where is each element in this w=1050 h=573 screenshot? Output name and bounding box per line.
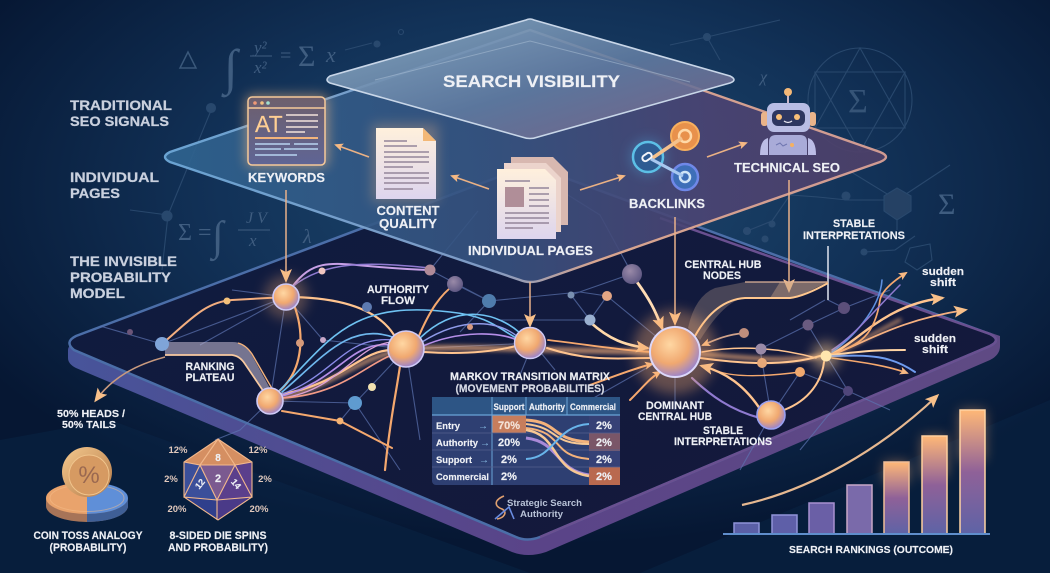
matrix text: 2% xyxy=(501,471,517,483)
matrix flows xyxy=(526,420,589,476)
side labels: TRADITIONAL xyxy=(70,97,172,113)
icon: eight sided die: 20% xyxy=(167,504,187,515)
matrix text: Authority xyxy=(529,402,566,412)
network labels: INTERPRETATIONS xyxy=(803,230,905,242)
network labels: CENTRAL HUB xyxy=(684,259,762,271)
panel: traditional seo signals plane xyxy=(165,30,886,282)
matrix text: Entry xyxy=(436,421,461,432)
logo: strategic search authority: Authority xyxy=(520,509,563,519)
icon: keywords window xyxy=(246,95,328,167)
network labels: DOMINANT xyxy=(646,400,704,412)
matrix text: → xyxy=(479,455,489,466)
icon: eight sided die: 12 xyxy=(193,477,207,491)
matrix text: 70% xyxy=(498,420,520,432)
faint math formulas: x xyxy=(325,42,336,67)
network labels: RANKING xyxy=(186,361,234,373)
label: individual pages: INDIVIDUAL PAGES xyxy=(468,244,593,258)
panel: search visibility plane xyxy=(327,19,734,138)
network labels xyxy=(186,218,964,448)
chart: search rankings bars xyxy=(723,396,990,556)
matrix text: 2% xyxy=(596,420,612,432)
faint math formulas: x xyxy=(248,231,257,250)
arrow: plateau to coin toss xyxy=(96,357,165,400)
arrow: growth trend xyxy=(742,396,937,505)
matrix text: 2% xyxy=(501,454,517,466)
faint math formulas: = xyxy=(280,45,291,67)
label: 8-sided die xyxy=(168,530,268,554)
matrix text: Authority xyxy=(436,438,479,449)
panel: markov transition matrix xyxy=(432,371,620,485)
side labels: THE INVISIBLE xyxy=(70,253,177,269)
network labels: STABLE xyxy=(703,425,743,437)
matrix text: 20% xyxy=(498,437,520,449)
faint math formulas: x² xyxy=(253,58,268,77)
icon: eight sided die: 2% xyxy=(258,474,272,485)
network labels: shift xyxy=(930,277,956,289)
faint constellation lines xyxy=(130,20,950,270)
faint math formulas: y² xyxy=(252,38,268,57)
band: ranking plateau xyxy=(165,342,274,398)
arrows: signals down to network xyxy=(286,180,828,325)
side labels: SEO SIGNALS xyxy=(70,113,169,129)
network labels: NODES xyxy=(703,270,741,282)
icon: eight sided die xyxy=(164,439,272,520)
label: 50% heads 50% tails: 50% TAILS xyxy=(62,419,116,431)
label: content quality xyxy=(376,204,440,231)
icon: individual pages stack xyxy=(497,157,568,239)
label: 50% heads 50% tails: 50% HEADS / xyxy=(57,408,125,420)
logo: strategic search authority: Strategic Search xyxy=(507,498,582,508)
icon: eight sided die: 8 xyxy=(215,453,221,464)
network labels: FLOW xyxy=(381,295,416,307)
icon: eight sided die: 20% xyxy=(249,504,269,515)
band: central hub nodes xyxy=(688,282,828,340)
label: coin toss analogy: (PROBABILITY) xyxy=(50,542,127,554)
side labels: PROBABILITY xyxy=(70,269,172,285)
icon: coin toss xyxy=(46,447,128,522)
network labels: PLATEAU xyxy=(186,372,235,384)
label: keywords: KEYWORDS xyxy=(248,171,325,185)
label: coin toss analogy: COIN TOSS ANALOGY xyxy=(34,530,143,542)
network labels: sudden xyxy=(914,333,956,345)
faint math formulas: Σ = xyxy=(178,220,212,246)
matrix text: 2% xyxy=(596,437,612,449)
matrix text: Support xyxy=(494,402,524,412)
faint math formulas: J V xyxy=(246,210,269,227)
faint math formulas: Σ xyxy=(938,188,955,221)
matrix title xyxy=(450,371,611,395)
matrix title: (MOVEMENT PROBABILITIES) xyxy=(456,383,605,395)
icon: eight sided die: 12% xyxy=(168,445,188,456)
arrows: between signals xyxy=(336,143,746,190)
label: 8-sided die: 8-SIDED DIE SPINS xyxy=(170,530,266,542)
label: backlinks: BACKLINKS xyxy=(629,197,705,211)
faint math formulas: ∫ xyxy=(221,39,241,98)
network nodes xyxy=(127,264,853,429)
icon: eight sided die: 2 xyxy=(215,473,221,485)
icon: technical seo robot xyxy=(760,88,816,155)
matrix text xyxy=(436,402,616,483)
authority flow curves xyxy=(162,264,965,470)
network labels: CENTRAL HUB xyxy=(638,411,712,423)
matrix text: → xyxy=(478,421,488,432)
label: 50% heads 50% tails xyxy=(57,408,125,431)
network labels: AUTHORITY xyxy=(367,284,430,296)
network labels: sudden xyxy=(922,266,964,278)
matrix text: → xyxy=(480,438,490,449)
label: search rankings: SEARCH RANKINGS (OUTCOME) xyxy=(789,544,953,556)
panel: invisible probability model platform xyxy=(68,165,1000,555)
side labels: INDIVIDUAL xyxy=(70,169,159,185)
network labels: INTERPRETATIONS xyxy=(674,436,772,448)
icon: eight sided die: 12% xyxy=(248,445,268,456)
icon: content quality document xyxy=(372,124,438,202)
network labels: STABLE xyxy=(833,218,875,230)
faint network web xyxy=(100,190,890,470)
matrix text: 2% xyxy=(596,471,612,483)
matrix text: Commercial xyxy=(436,472,489,483)
label: content quality: QUALITY xyxy=(379,217,438,231)
icon: eight sided die: 2% xyxy=(164,474,178,485)
icon: backlinks chain xyxy=(630,122,699,190)
matrix text: 2% xyxy=(596,454,612,466)
heading: search visibility: SEARCH VISIBILITY xyxy=(443,73,620,91)
faint math formulas xyxy=(178,38,955,262)
logo: strategic search authority xyxy=(495,496,582,519)
label: 8-sided die: AND PROBABILITY) xyxy=(168,542,268,554)
faint math formulas: χ xyxy=(758,69,768,86)
side labels: MODEL xyxy=(70,285,125,301)
matrix title: MARKOV TRANSITION MATRIX xyxy=(450,371,611,383)
icon: keywords window: AT xyxy=(255,111,283,137)
side labels: PAGES xyxy=(70,185,120,201)
icon: eight sided die: 14 xyxy=(229,477,243,491)
matrix text: Commercial xyxy=(570,402,616,412)
network labels: shift xyxy=(922,344,948,356)
faint math formulas: Σ xyxy=(298,40,315,73)
matrix text: Support xyxy=(436,455,473,466)
side labels xyxy=(70,97,177,301)
label: coin toss analogy xyxy=(34,530,143,554)
faint constellation lines: Σ xyxy=(848,83,868,120)
icon: coin toss: % xyxy=(78,462,100,489)
label: content quality: CONTENT xyxy=(376,204,440,218)
label: technical seo: TECHNICAL SEO xyxy=(734,161,840,175)
faint math formulas: λ xyxy=(302,226,312,248)
faint math formulas: ∫ xyxy=(209,214,226,262)
